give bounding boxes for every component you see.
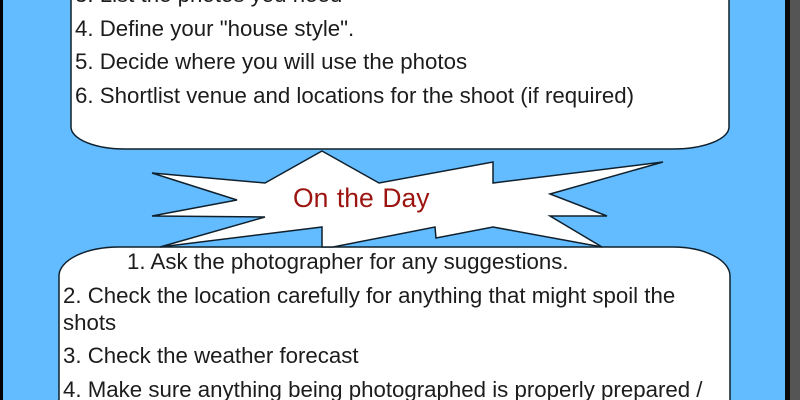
heading: on the day: On the Day xyxy=(293,183,429,213)
right black and gray border xyxy=(785,0,800,400)
list item 2: shots xyxy=(63,310,116,335)
text: on the day list xyxy=(63,249,702,400)
list item 2: 2. Check the location carefully for anything that might spoil the xyxy=(63,283,675,308)
list item 2 xyxy=(63,283,675,335)
list item 4: 4. Define your "house style". xyxy=(75,16,354,41)
text: preparation list xyxy=(75,0,634,108)
left black border xyxy=(0,0,3,400)
list item 6: 6. Shortlist venue and locations for the shoot (if required) xyxy=(75,83,634,108)
list item 5: 5. Decide where you will use the photos xyxy=(75,49,467,74)
list item 3: 3. Check the weather forecast xyxy=(63,343,359,368)
list item 1: 1. Ask the photographer for any suggestions. xyxy=(127,249,569,274)
